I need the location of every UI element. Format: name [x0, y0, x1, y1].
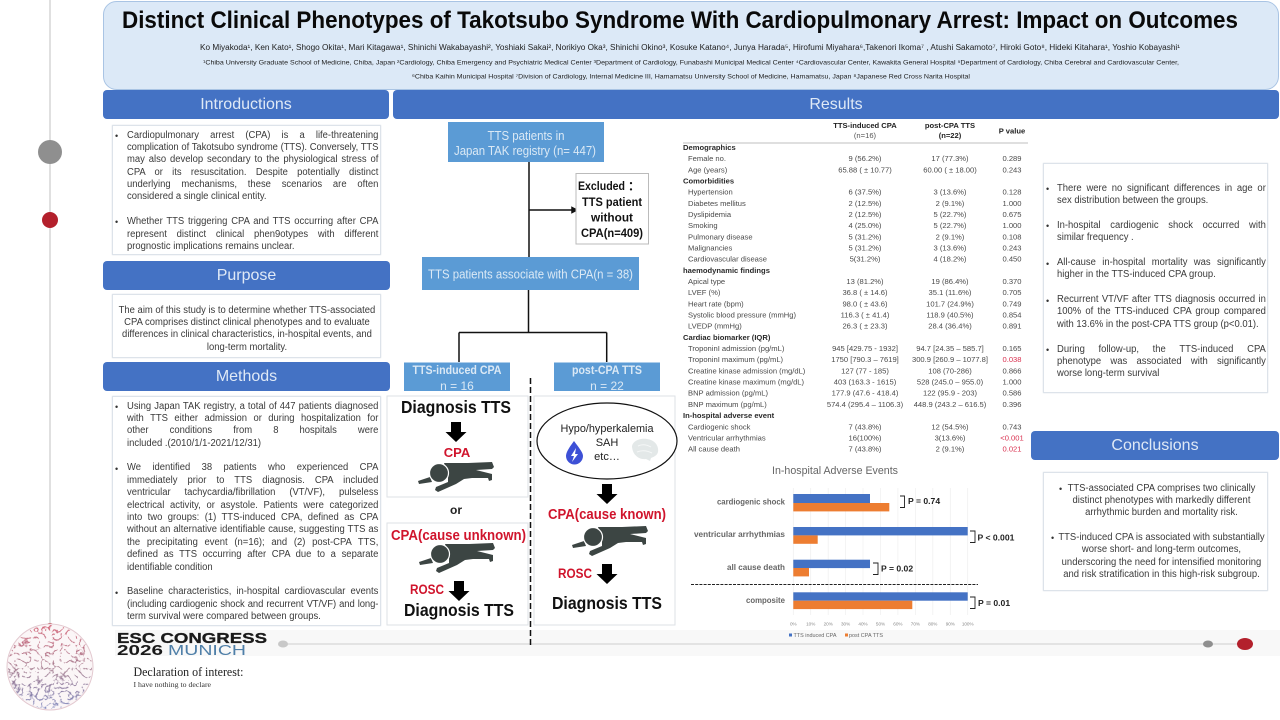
baseline characteristics table — [683, 121, 1028, 454]
pathway panel: CPA cause unknown — [387, 523, 528, 625]
known causes ellipse: SAH — [596, 437, 618, 449]
flow box: CPA patients: TTS patients associate with CPA(n = 38) — [428, 268, 633, 282]
text block: introduction bullets: complication of Takotsubo syndrome (TTS). Conversely, TTS — [127, 142, 378, 153]
bars: all cause death: all cause death — [727, 562, 785, 572]
heading: Methods: Methods — [216, 368, 277, 385]
known causes ellipse — [537, 403, 677, 479]
panel: conclusions — [1043, 472, 1268, 591]
section: comorbidities: 2 (9.1%) — [936, 199, 965, 208]
congress logo: MUNICH — [168, 643, 246, 659]
section: comorbidities: 6 (37.5%) — [849, 188, 882, 197]
heading: Introductions — [103, 90, 389, 119]
section: comorbidities: Dyslipidemia — [688, 210, 732, 219]
section: haemodynamic findings: Heart rate (bpm) — [688, 299, 744, 308]
panel: methods — [112, 396, 381, 626]
heading: Purpose — [103, 261, 390, 290]
footer band — [115, 630, 1280, 656]
table header: (n=22) — [939, 131, 962, 140]
section: haemodynamic findings: haemodynamic findings — [683, 266, 770, 275]
section: comorbidities: 4 (25.0%) — [849, 221, 882, 230]
group divider — [530, 378, 532, 646]
section: cardiac biomarker: 528 (245.0 – 955.0) — [917, 378, 984, 387]
section: comorbidities: 3 (13.6%) — [934, 188, 967, 197]
table header: P value — [999, 126, 1025, 136]
section: cardiac biomarker: 0.586 — [1002, 389, 1022, 398]
text block: results bullets: higher in the TTS-induced CPA group. — [1057, 269, 1216, 280]
table header: (n=16) — [854, 131, 877, 140]
flow connectors — [459, 162, 607, 362]
text block: results bullets — [1057, 182, 1266, 379]
affiliations: ¹Chiba University Graduate School of Medicine, Chiba, Japan ²Cardiology, Chiba Emergency and Psychiatric Medical Center ³Department of Cardiology, Funabashi Municipal Medical Center ⁴Cardiovascular Center, Kawakita General Hospital ⁵Department of Cardiology, Chiba Cerebral and Cardiovascular Center, — [203, 60, 1179, 66]
panel: methods: • — [115, 402, 118, 412]
section: in-hospital adverse event: Ventricular arrhythmias — [688, 433, 766, 442]
section: haemodynamic findings: 28.4 (36.4%) — [928, 322, 972, 331]
section: demographics: Demographics — [683, 143, 736, 152]
axis labels: 30% — [841, 622, 850, 626]
title panel — [104, 2, 1278, 90]
section: comorbidities: Comorbidities — [683, 176, 734, 186]
section: cardiac biomarker: Creatine kinase admission (mg/dL) — [688, 366, 806, 375]
section: haemodynamic findings: 35.1 (11.6%) — [929, 288, 972, 297]
section: haemodynamic findings: 36.8 ( ± 14.6) — [842, 288, 888, 297]
panel: results summary: • — [1046, 345, 1049, 355]
section: in-hospital adverse event: All cause death — [688, 445, 740, 454]
text block: purpose statement: The aim of this study is to determine whether TTS-associated — [118, 304, 375, 316]
heading: Methods — [103, 362, 390, 391]
group header: post-CPA TTS: post-CPA TTS — [572, 363, 642, 377]
text block: purpose statement: differences in clinical characteristics, in-hospital events, and — [122, 329, 372, 340]
text block: methods bullets: other conditions from 8 hospitals were — [127, 425, 378, 436]
text block: introduction bullets: may also develop secondary to the physiological stress of — [127, 154, 378, 165]
text block: conclusion bullets: underscoring the need for intensified monitoring — [1061, 557, 1261, 568]
section: cardiac biomarker: 1.000 — [1002, 378, 1022, 387]
panel: methods: • — [115, 464, 118, 474]
panel: conclusions: • — [1059, 484, 1062, 494]
pathway panel: diagnosis then CPA: Diagnosis TTS — [401, 397, 511, 417]
panel: introductions — [112, 125, 381, 255]
text block: results bullets: Recurrent VT/VF after TTS diagnosis occurred in — [1057, 294, 1266, 305]
section: in-hospital adverse event: <0.001 — [1000, 433, 1024, 442]
panel: purpose — [112, 294, 381, 358]
bars: all cause death: P = 0.02 — [881, 564, 913, 574]
section: in-hospital adverse event: 7 (43.8%) — [849, 422, 882, 431]
pathway panel: CPA cause unknown: Diagnosis TTS — [404, 600, 514, 620]
flow box: registry: TTS patients in — [488, 129, 565, 143]
section: comorbidities: 0.675 — [1002, 210, 1022, 219]
text block: methods bullets: without an alternative identifiable cause, suggesting TTS as — [127, 524, 378, 535]
panel: results summary: • — [1046, 296, 1049, 306]
section: haemodynamic findings — [683, 266, 1022, 331]
panel: results summary: • — [1046, 221, 1049, 231]
section: cardiac biomarker: TroponinI maximum (pg/mL) — [688, 355, 784, 364]
flow box: excluded: ： — [628, 179, 640, 193]
text block: conclusion bullets: and risk stratification in this high-risk subgroup. — [1063, 569, 1259, 580]
declaration of interest: I have nothing to declare — [134, 680, 212, 689]
text block: results bullets: with 13.6% in the post-CPA TTS group (p<0.01). — [1057, 319, 1259, 330]
text block: methods bullets: defined as TTS occurring after CPA due to a separate — [127, 549, 378, 560]
text block: conclusion bullets: TTS-induced CPA is associated with substantially — [1058, 532, 1264, 543]
heading: Conclusions — [1031, 431, 1279, 460]
section: comorbidities: 5 (22.7%) — [934, 221, 967, 230]
section: cardiac biomarker: Creatine kinase maximum (mg/dL) — [688, 378, 805, 387]
section: haemodynamic findings: 19 (86.4%) — [931, 277, 969, 286]
section: comorbidities: 2 (12.5%) — [849, 210, 882, 219]
section: cardiac biomarker: BNP admission (pg/mL) — [688, 389, 769, 398]
section: cardiac biomarker: 177.9 (47.6 - 418.4) — [832, 389, 899, 398]
section: cardiac biomarker: 945 [429.75 - 1932] — [832, 344, 898, 353]
bars: ventricular arrhythmias: P < 0.001 — [978, 532, 1015, 542]
flow box: registry: Japan TAK registry (n= 447) — [454, 144, 596, 158]
flow box: excluded: without — [590, 210, 633, 224]
section: comorbidities: 5 (22.7%) — [934, 210, 967, 219]
chart title: In-hospital Adverse Events — [772, 465, 898, 477]
section: cardiac biomarker: 0.165 — [1002, 344, 1022, 353]
section: in-hospital adverse event: 0.021 — [1002, 445, 1022, 454]
flow box: excluded — [576, 174, 648, 244]
section: haemodynamic findings: Apical type — [688, 277, 725, 286]
section: comorbidities: 0.243 — [1002, 244, 1022, 252]
section: haemodynamic findings: LVEF (%) — [688, 288, 721, 297]
section: cardiac biomarker: 0.396 — [1002, 400, 1022, 409]
bars: composite: P = 0.01 — [978, 598, 1010, 608]
section: cardiac biomarker: 300.9 [260.9 – 1077.8] — [912, 355, 988, 364]
section: demographics: 0.289 — [1002, 154, 1022, 163]
section: cardiac biomarker: 108 (70-286) — [928, 366, 972, 375]
section: comorbidities: 2 (12.5%) — [849, 199, 882, 208]
flow box: excluded: CPA(n=409) — [581, 226, 643, 240]
text block: methods bullets — [127, 400, 378, 622]
chart legend — [789, 633, 883, 639]
text block: methods bullets: the precipitating event (n=16); and (2) post-CPA TTS, — [127, 537, 378, 548]
authors: Ko Miyakoda¹, Ken Kato¹, Shogo Okita¹, Mari Kitagawa¹, Shinichi Wakabayashi², Yoshiaki Sakai², Norikiyo Oka³, Shinichi Okino³, Kosuke Katano⁴, Junya Harada⁵, Hirofumi Miyahara⁶,Takenori Ikoma⁷ , Atushi Sakamoto⁷, Hiroki Goto⁸, Hideki Kitahara¹, Yoshio Kobayashi¹ — [200, 43, 1180, 52]
table header: post-CPA TTS — [925, 121, 975, 130]
section: haemodynamic findings: 98.0 ( ± 43.6) — [842, 299, 888, 308]
section: comorbidities: Cardiovascular disease — [688, 255, 767, 264]
section: comorbidities: 5(31.2%) — [850, 255, 881, 264]
group header: TTS-induced CPA: n = 16 — [440, 379, 474, 393]
heading: Conclusions: Conclusions — [1111, 437, 1199, 454]
icon: brain — [632, 439, 658, 461]
axis labels: 0% — [790, 622, 797, 626]
text block: results bullets: worse long-term survival — [1057, 368, 1159, 379]
panel: results summary: • — [1046, 184, 1049, 194]
table header: TTS-induced CPA — [833, 121, 897, 130]
axis labels — [790, 622, 974, 626]
bars: ventricular arrhythmias — [694, 527, 1015, 544]
section: comorbidities: Malignancies — [688, 244, 733, 252]
section: demographics: 9 (56.2%) — [849, 154, 882, 163]
section: cardiac biomarker: 1750 [790.3 – 7619] — [831, 355, 899, 364]
section: in-hospital adverse event: In-hospital adverse event — [683, 411, 775, 420]
text block: introduction bullets: represent distinct clinical phen9otypes with different — [127, 229, 378, 240]
axis labels: 20% — [824, 622, 833, 626]
section: cardiac biomarker: 94.7 [24.35 – 585.7] — [916, 344, 984, 353]
section: cardiac biomarker — [683, 333, 1022, 409]
declaration of interest — [134, 665, 244, 689]
pathway panel: CPA cause unknown: ROSC — [410, 582, 444, 597]
group header: post-CPA TTS: n = 22 — [590, 379, 624, 393]
section: demographics: Age (years) — [688, 165, 728, 174]
icon: electrolyte drop — [566, 441, 583, 464]
bars: cardiogenic shock: cardiogenic shock — [717, 496, 785, 506]
bars: composite — [746, 592, 1010, 609]
text block: purpose statement: long-term mortality. — [207, 342, 287, 353]
affiliations: ⁶Chiba Kaihin Municipal Hospital ⁷Division of Cardiology, Internal Medicine III, Hamamatsu University School of Medicine, Hamamatsu, Japan ⁸Japanese Red Cross Narita Hospital — [412, 74, 971, 80]
section: haemodynamic findings: 0.854 — [1002, 311, 1022, 320]
section: haemodynamic findings: 101.7 (24.9%) — [926, 299, 974, 308]
section: comorbidities: 5 (31.2%) — [849, 244, 882, 252]
text block: introduction bullets: CPA or its resuscitation. Despite potentially distinct — [127, 167, 378, 178]
section: comorbidities — [683, 176, 1022, 264]
section: cardiac biomarker: Cardiac biomarker (IQR) — [683, 333, 771, 342]
section: in-hospital adverse event: 12 (54.5%) — [931, 422, 969, 431]
section: comorbidities: Diabetes mellitus — [688, 199, 746, 208]
text block: methods bullets: term survival were compared between groups. — [127, 611, 321, 622]
section: haemodynamic findings: 0.705 — [1002, 288, 1022, 297]
section: in-hospital adverse event: 3(13.6%) — [935, 433, 966, 442]
known causes ellipse: Hypo/hyperkalemia — [560, 423, 654, 435]
section: cardiac biomarker: 0.866 — [1002, 366, 1022, 375]
congress logo: ESC CONGRESS — [117, 631, 267, 647]
section: comorbidities: 0.108 — [1002, 232, 1022, 241]
text block: methods bullets: immediately prior to TTS diagnosis. CPA included — [127, 475, 378, 486]
text block: methods bullets: identifiable condition — [127, 562, 213, 573]
section: demographics — [683, 143, 1022, 174]
text block: results bullets: sex distribution between the groups. — [1057, 195, 1208, 206]
affiliations — [203, 60, 1179, 80]
text block: results bullets: In-hospital cardiogenic shock occurred with — [1057, 220, 1266, 231]
section: demographics: 0.243 — [1002, 165, 1022, 174]
text block: introduction bullets — [127, 130, 378, 252]
section: cardiac biomarker: 574.4 (295.4 – 1106.3) — [827, 400, 904, 409]
text block: conclusion bullets: worse short- and long-term outcomes, — [1081, 544, 1241, 555]
section: comorbidities: Hypertension — [688, 188, 733, 197]
section: comorbidities: 4 (18.2%) — [934, 255, 967, 264]
panel: results summary: • — [1046, 258, 1049, 268]
axis labels: 10% — [806, 622, 815, 626]
pathway panel: diagnosis then CPA: CPA — [444, 445, 471, 460]
section: comorbidities: 5 (31.2%) — [849, 232, 882, 241]
text block: results bullets: During follow-up, the TTS-induced CPA — [1057, 344, 1266, 355]
section: comorbidities: 0.128 — [1002, 188, 1022, 197]
table header — [683, 121, 1028, 143]
known causes ellipse: etc… — [594, 451, 620, 463]
section: cardiac biomarker: 122 (95.9 - 203) — [923, 389, 977, 398]
section: cardiac biomarker: TroponinI admission (pg/mL) — [688, 344, 785, 353]
section: comorbidities: Pulmonary disease — [688, 232, 753, 241]
pathway panel: CPA cause unknown: CPA(cause unknown) — [391, 528, 526, 544]
bars: all cause death — [727, 560, 913, 576]
pathway panel: CPA cause known — [534, 396, 677, 625]
text block: introduction bullets: Cardiopulmonary arrest (CPA) is a life-threatening — [127, 130, 378, 140]
section: haemodynamic findings: 118.9 (40.5%) — [926, 311, 974, 320]
text block: conclusion bullets: distinct phenotypes with markedly different — [1072, 495, 1250, 506]
text block: conclusion bullets: TTS-associated CPA comprises two clinically — [1067, 482, 1255, 494]
section: haemodynamic findings: 0.749 — [1002, 299, 1022, 308]
text block: methods bullets: electrical activity, or asystole. Patients were categorized — [127, 500, 378, 511]
section: comorbidities: Smoking — [688, 221, 718, 230]
chart legend: post CPA TTS — [849, 633, 883, 639]
panel: methods: • — [115, 588, 118, 598]
pathway panel: CPA cause known: CPA(cause known) — [548, 507, 666, 523]
section: demographics: 17 (77.3%) — [931, 154, 969, 163]
panel: introductions: • — [115, 130, 118, 140]
timeline decoration — [38, 0, 62, 631]
section: in-hospital adverse event: 2 (9.1%) — [936, 445, 965, 454]
text block: methods bullets: Using Japan TAK registry, a total of 447 patients diagnosed — [127, 400, 378, 412]
section: demographics: 60.00 ( ± 18.00) — [923, 165, 977, 174]
section: cardiac biomarker: 0.038 — [1002, 355, 1022, 364]
text block: introduction bullets: underlying mechanisms, these scenarios are often — [127, 179, 378, 190]
axis labels: 60% — [893, 622, 903, 626]
section: haemodynamic findings: Systolic blood pressure (mmHg) — [688, 311, 797, 320]
section: comorbidities: 0.450 — [1002, 255, 1022, 264]
text block: methods bullets: Baseline characteristics, in-hospital cardiovascular events — [127, 586, 378, 597]
axis labels: 100% — [962, 622, 974, 626]
heading: Results: Results — [809, 96, 863, 113]
bars: ventricular arrhythmias: ventricular arrhythmias — [694, 529, 785, 539]
text block: purpose statement — [118, 304, 375, 353]
pathway panel: CPA cause known: Diagnosis TTS — [552, 593, 662, 613]
heading: Purpose: Purpose — [217, 267, 276, 284]
group header: TTS-induced CPA: TTS-induced CPA — [412, 363, 502, 377]
axis labels: 40% — [858, 622, 868, 626]
composite divider — [691, 584, 978, 586]
pathway panel: diagnosis then CPA — [387, 396, 528, 497]
flow box: excluded: Excluded — [578, 179, 625, 193]
text block: methods bullets: We identified 38 patients who experienced CPA — [127, 462, 378, 473]
text block: methods bullets: (including cardiogenic shock and recurrent VT/VF) and long- — [127, 599, 378, 610]
section: cardiac biomarker: BNP maximum (pg/mL) — [688, 400, 767, 409]
label: or: or — [450, 503, 462, 517]
flow chart — [387, 122, 677, 646]
section: cardiac biomarker: 127 (77 - 185) — [841, 366, 889, 375]
axis labels: 50% — [876, 622, 885, 626]
flow box: registry — [448, 122, 604, 162]
panel: conclusions: • — [1051, 533, 1054, 543]
section: in-hospital adverse event: 0.743 — [1002, 422, 1022, 431]
section: comorbidities: 1.000 — [1002, 199, 1022, 208]
section: haemodynamic findings: 116.3 ( ± 41.4) — [841, 311, 890, 320]
flow box: excluded: TTS patient — [582, 195, 642, 209]
section: cardiac biomarker: 448.9 (243.2 – 616.5) — [914, 400, 987, 409]
section: demographics: 65.88 ( ± 10.77) — [838, 165, 892, 174]
axis labels: 80% — [928, 622, 937, 626]
section: haemodynamic findings: 0.891 — [1002, 322, 1022, 331]
panel: introductions: • — [115, 217, 118, 227]
section: haemodynamic findings: 26.3 ( ± 23.3) — [842, 322, 888, 331]
section: haemodynamic findings: LVEDP (mmHg) — [688, 322, 742, 331]
text block: methods bullets: with TTS either admission or during hospitalization for — [127, 413, 378, 424]
text block: results bullets: There were no significant differences in age or — [1057, 182, 1266, 194]
axis labels: 90% — [946, 622, 955, 626]
section: in-hospital adverse event: Cardiogenic shock — [688, 422, 751, 431]
heading: Results — [393, 90, 1279, 119]
text block: conclusion bullets: arrhythmic burden and mortality risk. — [1085, 507, 1237, 518]
bar chart: in-hospital adverse events — [691, 465, 1015, 639]
chart legend: TTS induced CPA — [794, 633, 837, 639]
text block: methods bullets: included .(2010/1/1-2021/12/31) — [127, 438, 261, 449]
section: comorbidities: 1.000 — [1002, 221, 1022, 230]
congress logo: 2026 — [117, 643, 163, 659]
text block: purpose statement: CPA comprises distinct clinical phenotypes and to evaluate — [124, 317, 370, 328]
text block: introduction bullets: prognostic implications remains unclear. — [127, 241, 295, 252]
section: in-hospital adverse event: 16(100%) — [849, 433, 882, 442]
group header: post-CPA TTS — [554, 362, 660, 393]
pathway panel: CPA cause known: ROSC — [558, 566, 592, 581]
text block: results bullets: All-cause in-hospital mortality was significantly — [1057, 257, 1266, 268]
bars: cardiogenic shock: P = 0.74 — [908, 496, 940, 506]
section: demographics: Female no. — [688, 154, 726, 163]
axis labels: 70% — [911, 622, 920, 626]
text block: methods bullets: into two groups: (1) TTS-induced CPA, defined as CPA — [127, 512, 378, 523]
text block: introduction bullets: considered a single clinical entity. — [127, 191, 267, 202]
flow box: CPA patients — [422, 257, 639, 290]
group header: TTS-induced CPA — [404, 362, 510, 393]
bars: cardiogenic shock — [717, 494, 940, 511]
section: cardiac biomarker: 403 (163.3 - 1615) — [834, 378, 897, 387]
section: comorbidities: 2 (9.1%) — [936, 232, 965, 241]
text block: conclusion bullets — [1058, 482, 1264, 580]
heading: Introductions: Introductions — [200, 96, 292, 113]
bars: composite: composite — [746, 595, 785, 605]
text block: introduction bullets: Whether TTS triggering CPA and TTS occurring after CPA — [127, 216, 378, 227]
declaration of interest: Declaration of interest: — [134, 665, 244, 679]
section: comorbidities: 3 (13.6%) — [934, 244, 967, 252]
section: haemodynamic findings: 0.370 — [1002, 277, 1022, 286]
text block: results bullets: phenotype was associated with significantly — [1057, 356, 1266, 367]
section: in-hospital adverse event — [683, 411, 1024, 454]
congress logo — [117, 631, 267, 659]
section: haemodynamic findings: 13 (81.2%) — [846, 277, 884, 286]
text block: results bullets: similar frequency . — [1057, 232, 1134, 243]
section: in-hospital adverse event: 7 (43.8%) — [849, 445, 882, 454]
icon: vascular globe — [7, 624, 93, 710]
panel: results summary — [1043, 163, 1268, 393]
text block: results bullets: 100% of the TTS-induced CPA group compared — [1057, 306, 1266, 317]
text block: methods bullets: ventricular tachycardia/fibrillation (VT/VF), pulseless — [127, 487, 378, 498]
